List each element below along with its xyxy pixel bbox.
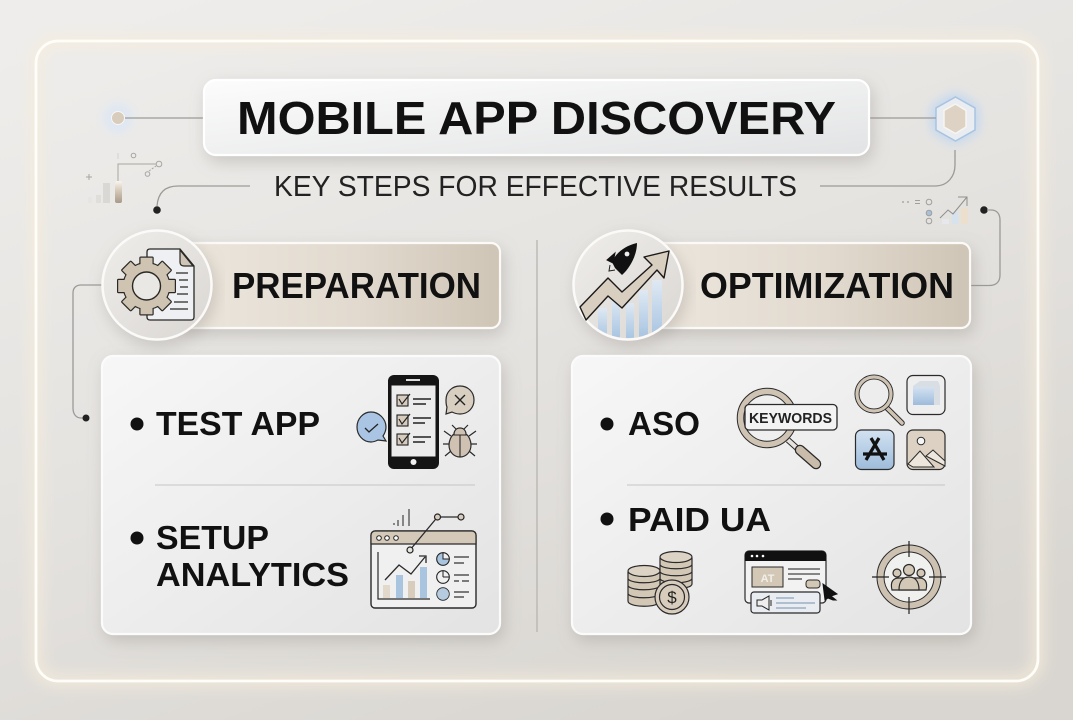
heading: optimization: OPTIMIZATION (700, 265, 954, 306)
icon: ad window with cursor: AT (761, 573, 775, 585)
optimization connector (971, 206, 1000, 286)
label: test app: TEST APP (156, 405, 320, 442)
bullet: aso (600, 418, 614, 430)
right title node: hexagon (870, 93, 978, 144)
icon: audience target (872, 541, 946, 614)
icon: keywords magnifier: KEYWORDS (749, 411, 832, 427)
title panel (204, 80, 869, 155)
left title node (104, 104, 203, 132)
label: analytics: ANALYTICS (156, 556, 349, 593)
icon: coins (628, 552, 692, 614)
decoration: right mini chart (902, 197, 968, 224)
icon: app store tile (856, 430, 894, 470)
label: paid ua: PAID UA (628, 501, 771, 538)
panel: optimization header (574, 230, 970, 342)
panel: preparation header (102, 230, 500, 340)
decoration: left mini chart (86, 153, 162, 203)
label: aso: ASO (628, 405, 700, 442)
subtitle: KEY STEPS FOR EFFECTIVE RESULTS (274, 171, 797, 203)
title: MOBILE APP DISCOVERY (237, 92, 836, 144)
bullet: paid ua (600, 512, 614, 526)
heading: preparation: PREPARATION (232, 265, 481, 306)
icon: small search (857, 377, 902, 423)
icon: analytics window (371, 509, 476, 608)
panel: optimization steps (572, 356, 971, 634)
panel: preparation steps (102, 356, 500, 634)
label: setup analytics: SETUP (156, 519, 269, 556)
icon: coins: $ (667, 588, 677, 607)
icon: cube tile (907, 376, 945, 414)
icon: ad window with cursor (745, 551, 837, 613)
bullet: test app (130, 418, 144, 430)
icon: keywords magnifier (740, 392, 837, 464)
icon: rocket and growth arrow (580, 243, 669, 342)
bullet: setup analytics (130, 532, 144, 544)
icon: gear and document (117, 249, 194, 320)
right subtitle connector (820, 150, 955, 186)
left subtitle connector (153, 186, 250, 214)
preparation connector (73, 285, 102, 422)
icon: image tile (907, 430, 945, 470)
center divider (536, 240, 538, 632)
icon: phone checklist with bug (357, 375, 477, 469)
